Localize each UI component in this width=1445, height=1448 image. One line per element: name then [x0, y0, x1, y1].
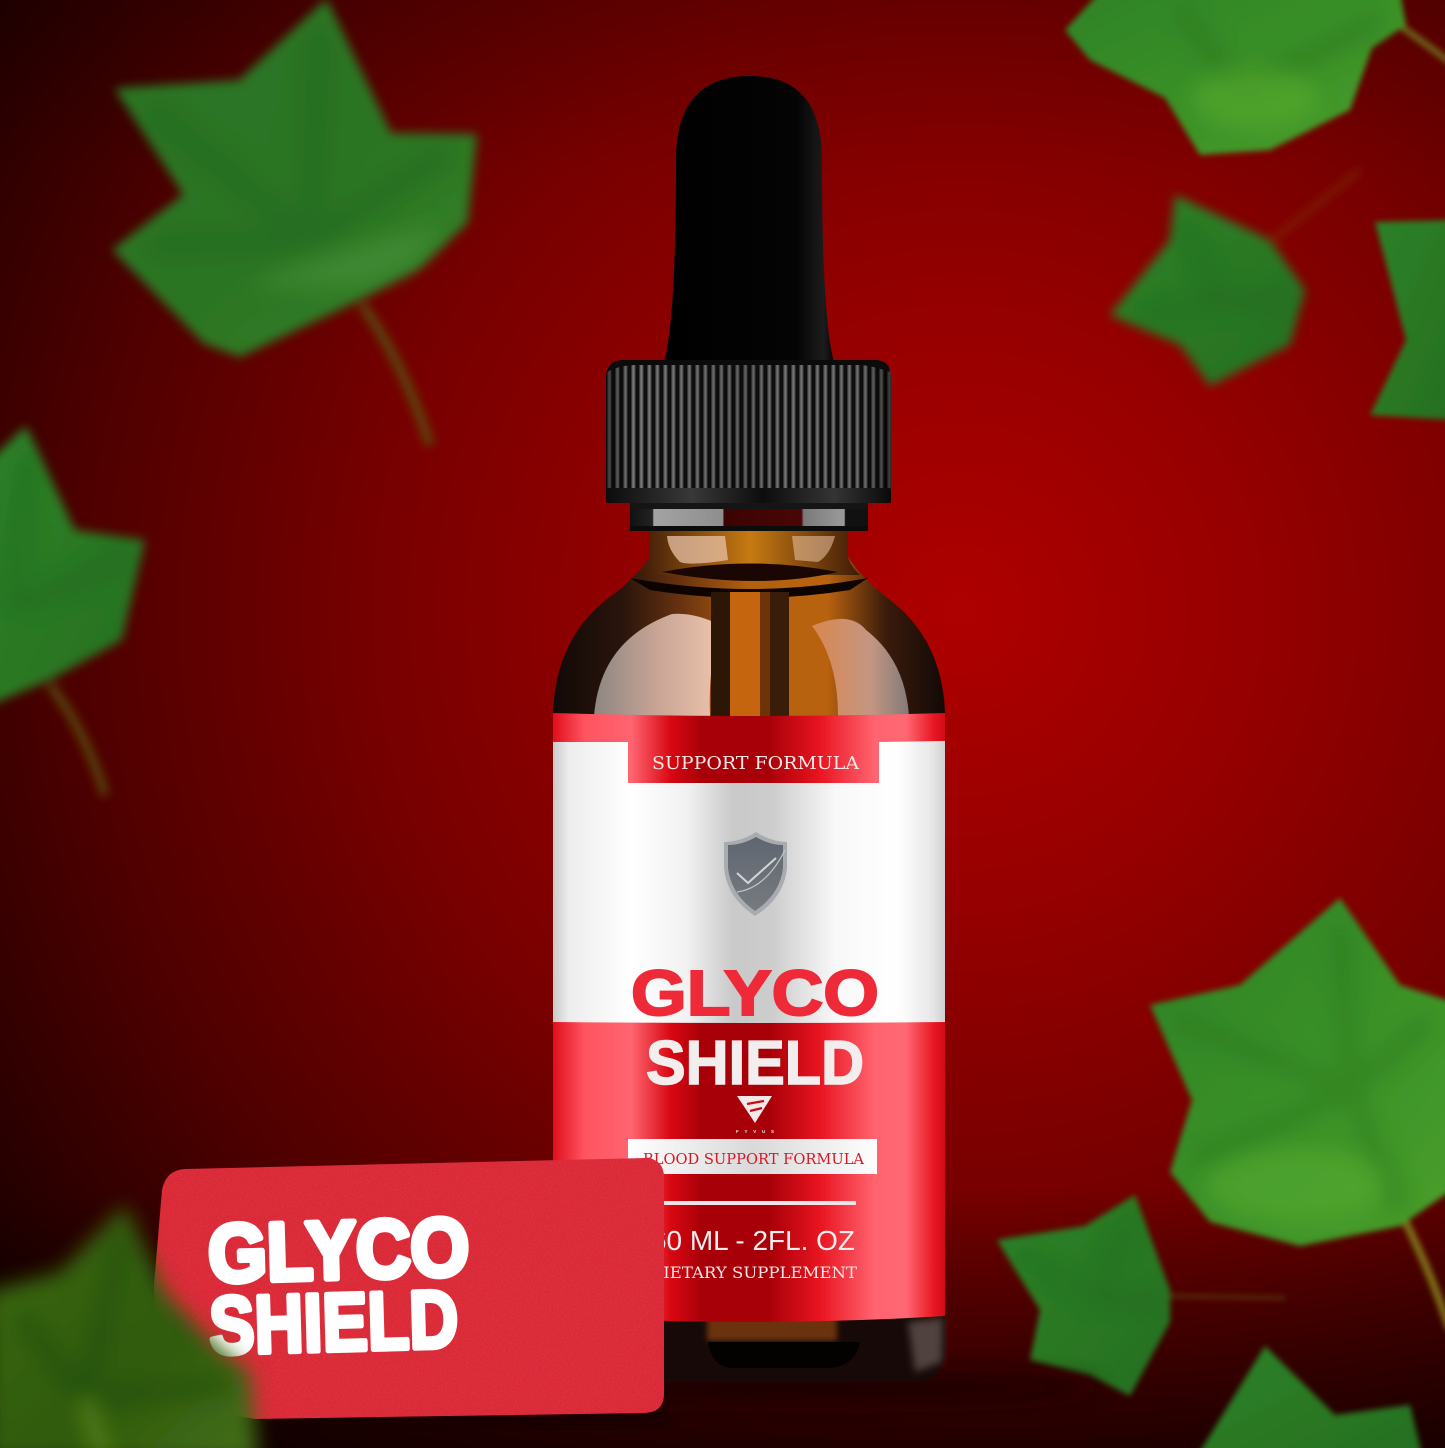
ivy leaf: left edge	[0, 426, 145, 795]
label red band	[553, 713, 945, 1322]
card title SHIELD: SHIELD	[208, 1274, 459, 1372]
icon: FYVUS logo: FYVUS	[736, 1129, 774, 1134]
card title GLYCO: GLYCO	[207, 1202, 470, 1300]
label strip text: BLOOD SUPPORT FORMULA	[643, 1150, 864, 1168]
collar ring	[630, 502, 868, 531]
volume text: 60 ML - 2FL. OZ	[651, 1225, 855, 1256]
ivy leaf: top right	[1065, 0, 1445, 155]
card shadow	[240, 1412, 670, 1426]
supplement text: DIETARY SUPPLEMENT	[650, 1263, 857, 1282]
ivy leaf: top left	[115, 2, 475, 445]
red felt product card	[150, 1155, 670, 1425]
label white strip	[628, 1139, 877, 1174]
icon: shield with check	[724, 832, 787, 916]
ivy leaf: right edge	[1370, 220, 1445, 420]
dropper bulb	[664, 76, 834, 362]
ivy leaf: bottom left foreground	[0, 1205, 258, 1448]
bottle shadow	[500, 1374, 1100, 1402]
ivy leaf: bottom right corner	[1198, 1346, 1422, 1448]
ivy leaf: bottom centre-right	[997, 1195, 1285, 1396]
product label	[553, 713, 945, 1322]
ribbed cap	[606, 360, 891, 503]
bottle glass	[553, 530, 945, 1382]
dropper bottle	[553, 76, 945, 1382]
ivy leaf: bottom right large	[1150, 898, 1445, 1330]
label white band	[553, 741, 945, 1023]
icon: FYVUS logo	[736, 1096, 774, 1134]
label divider	[650, 1201, 856, 1205]
brand name SHIELD: SHIELD	[646, 1029, 864, 1098]
brand name GLYCO: GLYCO	[631, 957, 879, 1029]
ivy leaf: right upper	[1110, 170, 1360, 386]
label banner text: SUPPORT FORMULA	[652, 753, 860, 774]
